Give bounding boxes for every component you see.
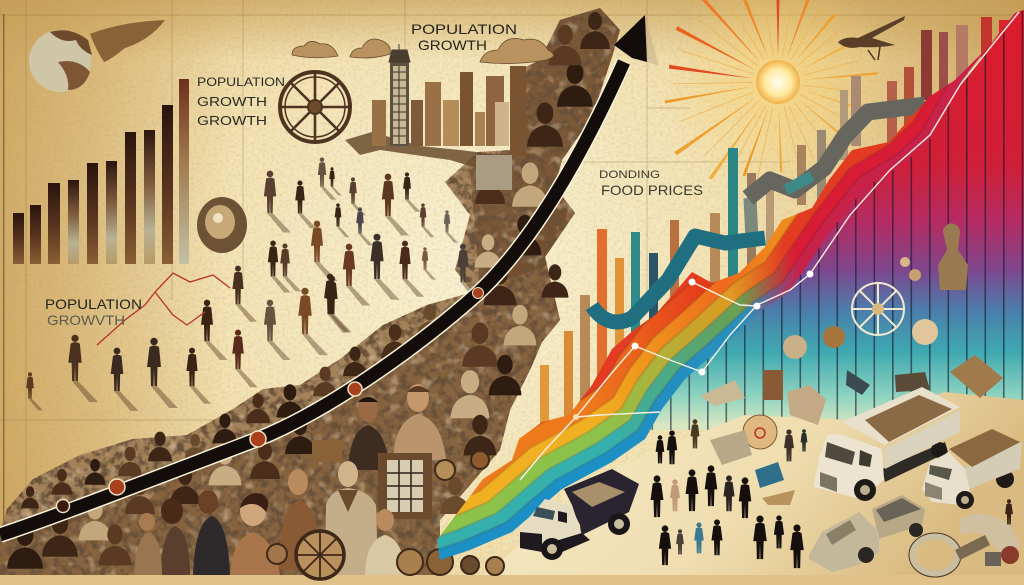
large gravel truck <box>814 387 960 501</box>
heading: population growth growth: POPULATION <box>197 75 285 89</box>
heading: population growth top <box>411 21 517 53</box>
heading: donding food prices: DONDING <box>599 169 660 181</box>
tire and tool <box>909 514 1020 577</box>
multicolor bar chart <box>540 17 1019 435</box>
heading: population growth lower: POPULATION <box>45 296 142 312</box>
heading: population growth lower: GROWVTH <box>47 312 125 328</box>
heading: donding food prices <box>599 169 703 198</box>
airplane icon <box>838 16 905 60</box>
ship wheel icon <box>280 72 350 142</box>
globe icon <box>29 20 165 92</box>
sun with rays <box>663 0 893 197</box>
heading: donding food prices: FOOD PRICES <box>601 182 703 198</box>
crowd background <box>0 8 620 575</box>
heading: population growth growth: GROWTH <box>197 113 267 128</box>
heading: population growth growth <box>197 75 285 128</box>
heading: population growth lower <box>45 296 142 328</box>
grey gravel truck <box>809 495 925 572</box>
second gravel truck <box>922 429 1022 509</box>
crowd small figures <box>7 12 610 569</box>
bottom parchment edge <box>0 575 1024 585</box>
rainbow price band <box>437 12 1018 560</box>
clouds <box>292 38 554 64</box>
silhouette people <box>651 419 1013 568</box>
red trend line <box>97 273 230 345</box>
walking people <box>26 157 482 411</box>
left bar chart <box>13 79 189 264</box>
heading: population growth top: POPULATION <box>411 21 517 37</box>
growth arrow <box>0 15 659 535</box>
crowd figures foreground <box>134 384 446 575</box>
ground plane <box>470 392 1024 585</box>
dark dump truck <box>519 469 639 560</box>
striped gradient panel <box>650 10 1024 430</box>
heading: population growth growth: GROWTH <box>197 94 267 109</box>
wagon wheels and coins <box>267 451 504 579</box>
white data line with nodes <box>520 12 1019 480</box>
city skyline <box>345 44 526 190</box>
coin emblem <box>197 197 247 253</box>
floating objects <box>700 224 1003 505</box>
ribbon: grey and teal <box>592 105 925 322</box>
heading: population growth top: GROWTH <box>418 37 487 53</box>
